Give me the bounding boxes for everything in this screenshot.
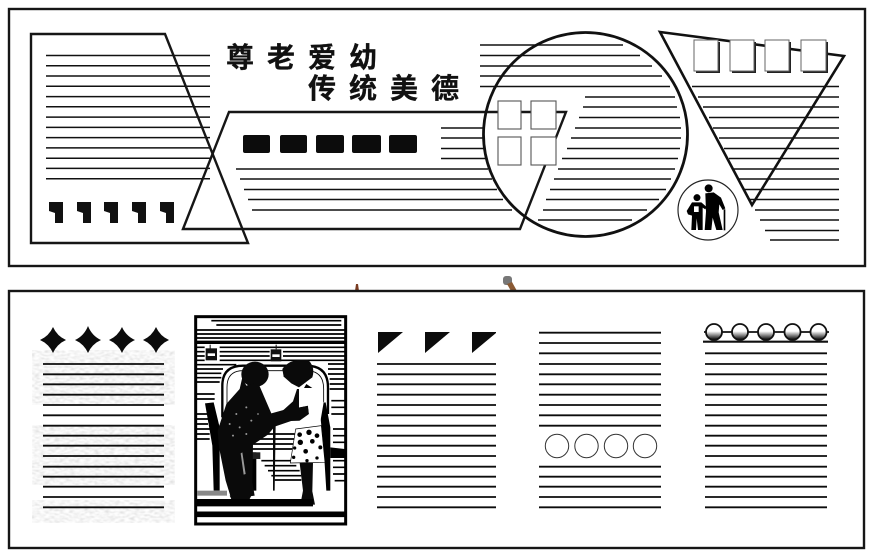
column 3: text block [377, 332, 496, 507]
icon row: four-point stars [40, 326, 169, 353]
icon row: black flags [49, 202, 174, 223]
middle parallelogram text block [183, 112, 566, 229]
left trapezoid text block [31, 34, 248, 243]
photo: elder and girl by a bed [196, 317, 346, 524]
black rounded blocks [243, 135, 417, 153]
icon row: beaded header [703, 324, 829, 342]
column 1: speckled text block [32, 326, 175, 523]
column 5: text block [703, 324, 829, 507]
floor [197, 491, 227, 496]
icon row: black triangles [378, 332, 496, 353]
ink specks between panels [355, 276, 517, 291]
hanging lamps [206, 345, 281, 361]
bed headboard [222, 366, 328, 417]
icon row: outlined circles [545, 434, 657, 458]
girl [278, 359, 313, 421]
elder [218, 362, 297, 499]
four shadowed frames on triangle [694, 40, 828, 73]
title [226, 42, 472, 104]
title: 传统美德 [308, 73, 472, 104]
chair [205, 402, 220, 491]
title: 尊老爱幼 [226, 42, 390, 73]
column 4: text block [539, 333, 661, 507]
four photo frames in circle [498, 101, 556, 165]
circle text block [480, 32, 688, 236]
icon: elder and child sign [678, 180, 738, 240]
panel: bottom board [9, 291, 864, 548]
panel: top board [9, 9, 865, 266]
bed post [319, 402, 330, 491]
right triangle text block [660, 32, 844, 240]
